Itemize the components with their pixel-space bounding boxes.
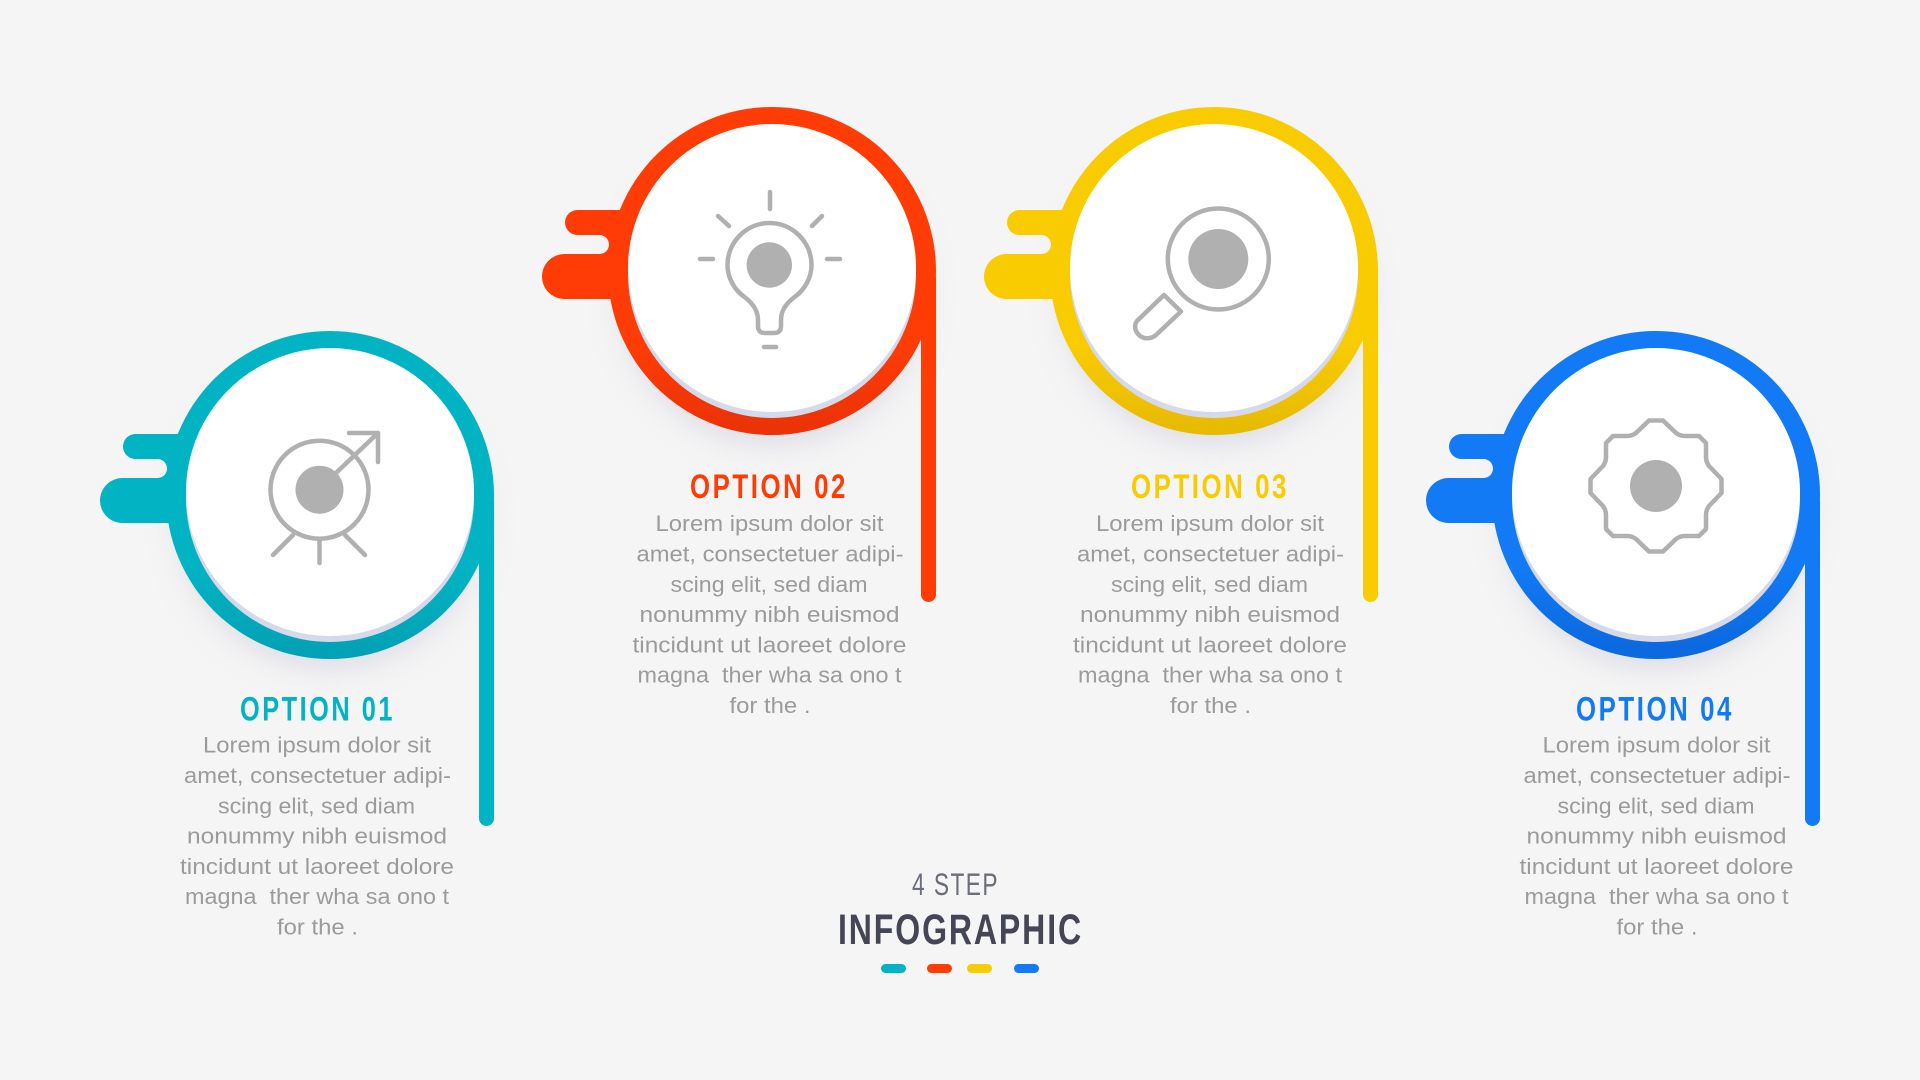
panel: option 03 xyxy=(984,107,1378,718)
text block: option 03 description: tincidunt ut laoreet dolore xyxy=(1073,632,1347,657)
heading: option 02: OPTION 02 xyxy=(690,468,848,506)
text block: option 01 description: magna ther wha sa ono t xyxy=(185,884,450,909)
text block: option 01 description: for the . xyxy=(277,914,358,940)
heading: option 03: OPTION 03 xyxy=(1131,468,1289,506)
text block: option 03 description: for the . xyxy=(1170,693,1251,718)
text block: option 02 description xyxy=(632,511,906,718)
text block: option 04 description: tincidunt ut laoreet dolore xyxy=(1520,854,1794,879)
icon: light bulb xyxy=(700,192,840,347)
text block: option 04 description xyxy=(1520,733,1794,940)
title: INFOGRAPHIC: INFOGRAPHIC xyxy=(838,907,1083,954)
text block: option 01 description: nonummy nibh euismod xyxy=(187,824,447,849)
text block: option 02 description: scing elit, sed diam xyxy=(670,572,868,597)
icon: target with arrow xyxy=(270,433,378,563)
text block: option 04 description: scing elit, sed diam xyxy=(1558,793,1754,818)
text block: option 03 description: nonummy nibh euismod xyxy=(1080,602,1340,627)
text block: option 01 description: amet, consectetuer adipi- xyxy=(184,763,451,788)
text block: option 02 description: tincidunt ut laoreet dolore xyxy=(632,632,906,657)
text block: option 04 description: nonummy nibh euismod xyxy=(1526,824,1786,849)
text block: option 03 description: scing elit, sed diam xyxy=(1111,572,1308,597)
ring: option 01 circle, tabs and stem xyxy=(100,331,494,826)
text block: option 01 description: scing elit, sed diam xyxy=(218,793,415,818)
legend: four colour dashes xyxy=(881,964,1039,973)
text block: option 04 description: for the . xyxy=(1616,914,1698,940)
icon: gear xyxy=(1590,420,1722,552)
heading: option 04: OPTION 04 xyxy=(1576,690,1734,728)
heading: option 01: OPTION 01 xyxy=(240,690,395,728)
panel: option 04 xyxy=(1426,331,1820,940)
ring: option 04 circle, tabs and stem xyxy=(1426,331,1820,826)
text block: option 01 description: Lorem ipsum dolor sit xyxy=(203,733,432,758)
text block: option 02 description: for the . xyxy=(730,693,810,718)
text block: option 04 description: magna ther wha sa ono t xyxy=(1524,884,1789,909)
text block: option 01 description xyxy=(180,733,454,940)
text block: option 02 description: magna ther wha sa ono t xyxy=(638,663,902,688)
text block: option 03 description: amet, consectetuer adipi- xyxy=(1077,542,1344,566)
text block: option 02 description: nonummy nibh euismod xyxy=(640,602,900,627)
ring: option 03 circle, tabs and stem xyxy=(984,107,1378,602)
text block: option 03 description: magna ther wha sa ono t xyxy=(1078,663,1343,688)
icon: magnifying glass xyxy=(1135,208,1269,338)
text block: option 03 description xyxy=(1073,511,1347,718)
text block: option 04 description: amet, consectetuer adipi- xyxy=(1524,763,1790,788)
panel: option 02 xyxy=(542,107,936,718)
text block: option 02 description: Lorem ipsum dolor sit xyxy=(656,511,884,536)
text block: option 03 description: Lorem ipsum dolor sit xyxy=(1096,511,1325,536)
title: 4 STEP: 4 STEP xyxy=(912,866,999,902)
ring: option 02 circle, tabs and stem xyxy=(542,107,936,602)
text block: option 04 description: Lorem ipsum dolor sit xyxy=(1542,733,1771,758)
text block: option 02 description: amet, consectetuer adipi- xyxy=(636,542,904,566)
panel: option 01 xyxy=(100,331,494,940)
text block: option 01 description: tincidunt ut laoreet dolore xyxy=(180,854,454,879)
title block xyxy=(838,866,1083,973)
